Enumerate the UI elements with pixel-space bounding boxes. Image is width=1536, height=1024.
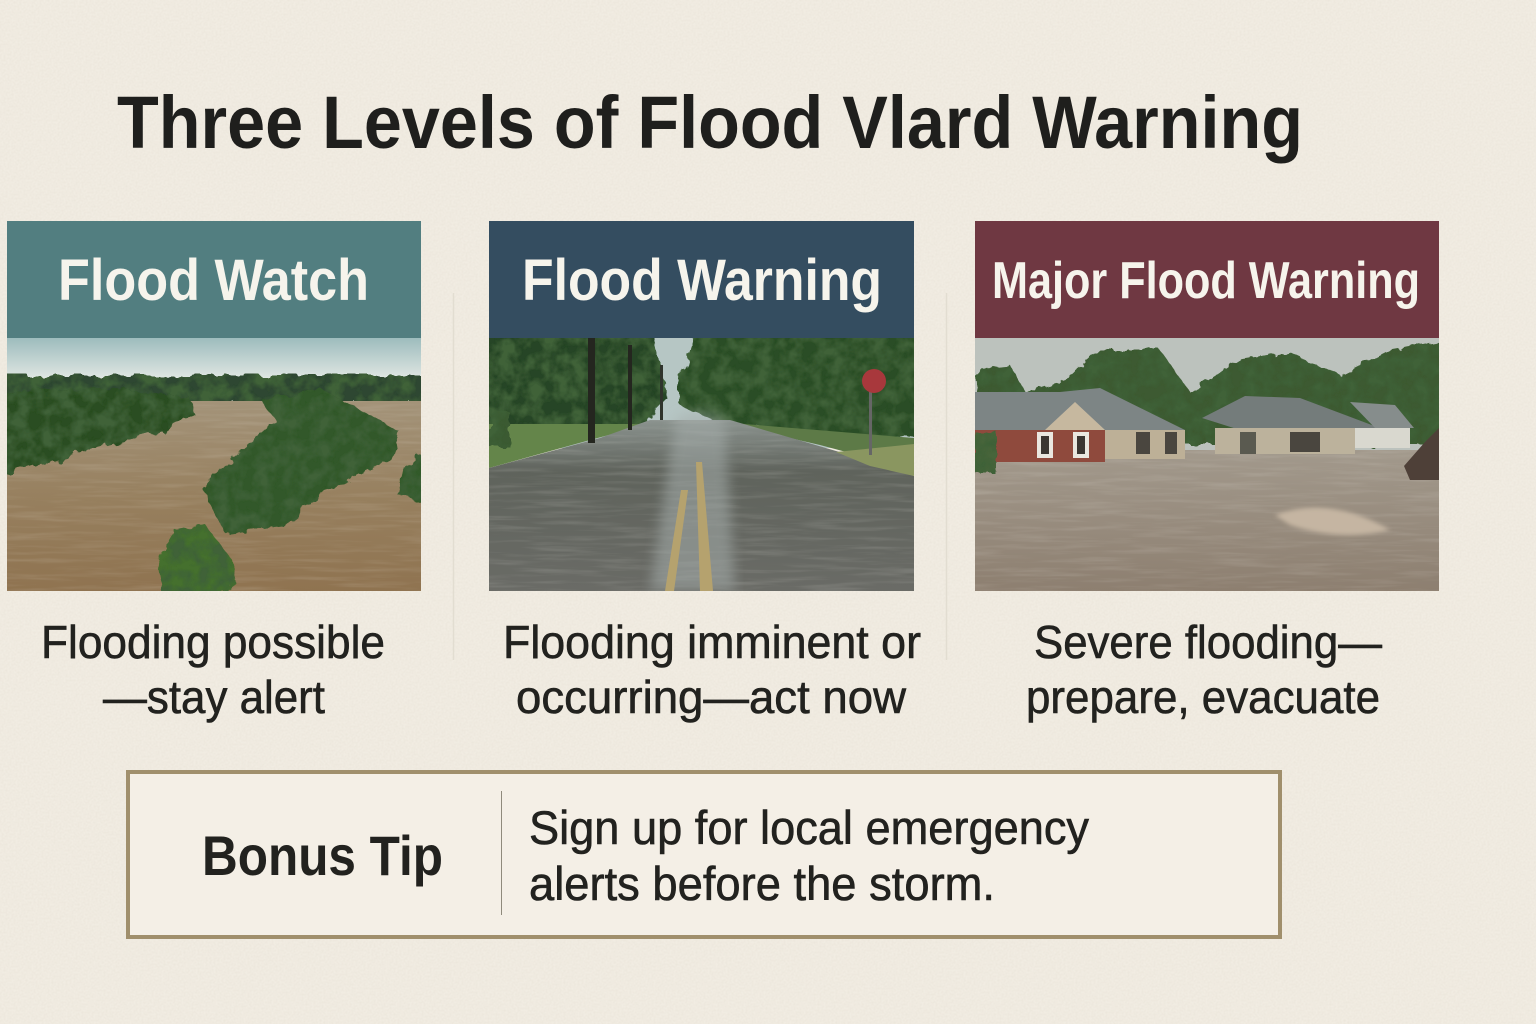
heading: flood watch <box>7 221 421 338</box>
bonus tip text: alerts before the storm. <box>529 857 995 910</box>
description: flood watch <box>41 616 385 723</box>
callout: bonus tip <box>128 772 1280 937</box>
description: major flood warning: prepare, evacuate <box>1026 671 1380 723</box>
heading: major flood warning: Major Flood Warning <box>992 252 1420 310</box>
bonus tip text <box>529 801 1089 910</box>
photo: flooded houses <box>975 338 1445 591</box>
description: flood warning: Flooding imminent or <box>503 616 921 668</box>
title: Three Levels of Flood Vlard Warning <box>117 81 1303 164</box>
panel: major flood warning <box>975 221 1445 723</box>
column dividers <box>454 293 946 660</box>
description: flood warning: occurring—act now <box>516 671 907 723</box>
description: flood watch: Flooding possible <box>41 616 385 668</box>
description: major flood warning: Severe flooding— <box>1034 616 1382 668</box>
photo: flooded river with trees <box>0 338 430 600</box>
description: flood warning <box>503 616 921 723</box>
panel: flood watch <box>0 221 430 723</box>
heading: major flood warning <box>975 221 1439 338</box>
heading: flood watch: Flood Watch <box>58 248 369 313</box>
description: flood watch: —stay alert <box>103 671 325 723</box>
bonus tip label: Bonus Tip <box>202 824 443 887</box>
heading: flood warning <box>489 221 914 338</box>
bonus tip text: Sign up for local emergency <box>529 801 1089 854</box>
photo: flooded road <box>480 330 925 591</box>
heading: flood warning: Flood Warning <box>522 248 882 313</box>
panel: flood warning <box>480 221 925 723</box>
description: major flood warning <box>1026 616 1382 723</box>
